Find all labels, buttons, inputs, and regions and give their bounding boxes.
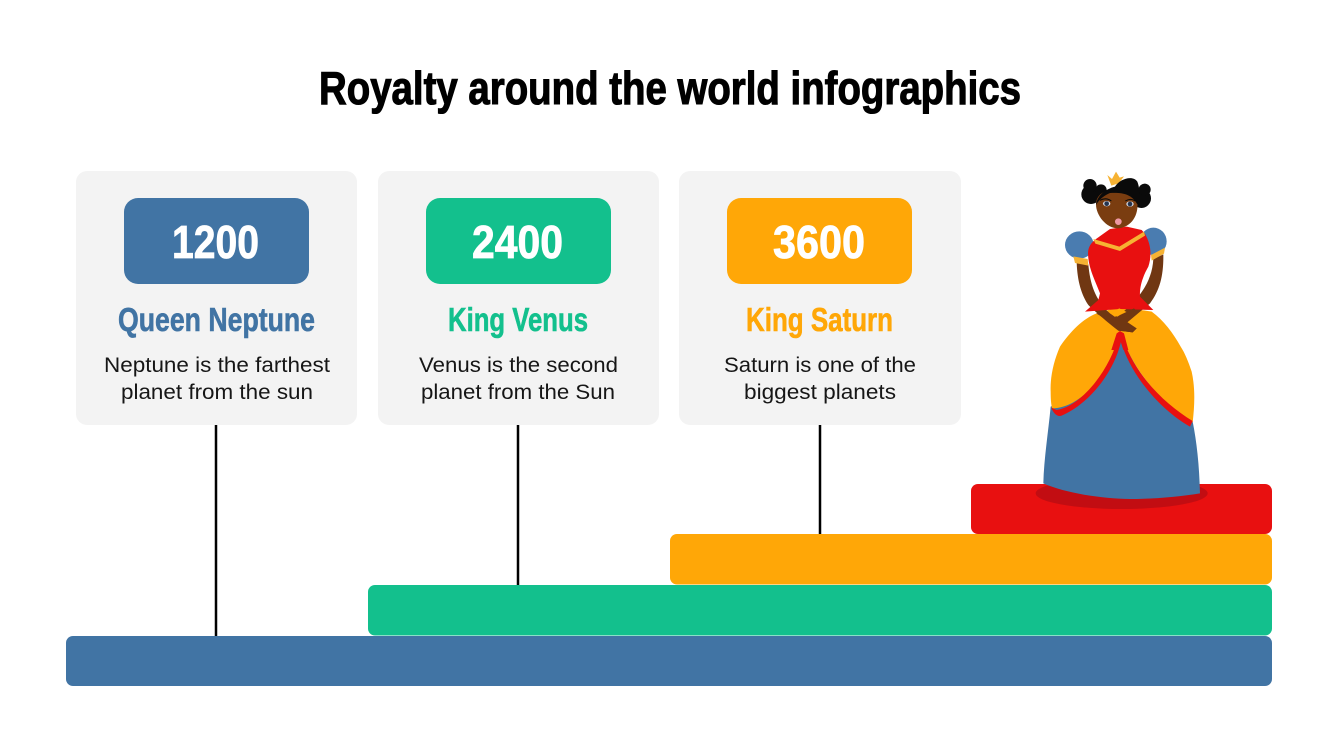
connector: King Venus xyxy=(517,424,519,585)
description xyxy=(104,353,330,404)
bar: blue step xyxy=(66,636,1272,686)
panel: King Saturn xyxy=(679,171,961,425)
panel: King Venus xyxy=(378,171,659,425)
panel: Queen Neptune xyxy=(76,171,357,425)
name: Queen Neptune: Queen Neptune xyxy=(118,301,315,338)
description: planet from the Sun xyxy=(421,380,615,404)
description: Neptune is the farthest xyxy=(104,353,330,377)
illustration: queen figure xyxy=(1036,172,1208,509)
name: King Saturn: King Saturn xyxy=(746,301,893,338)
bar: green step xyxy=(368,585,1272,636)
title: Royalty around the world infographics xyxy=(319,62,1021,114)
description: Venus is the second xyxy=(419,353,618,377)
year badge: 2400 xyxy=(426,198,611,284)
description: Saturn is one of the xyxy=(724,353,916,377)
year badge: 1200: 1200 xyxy=(172,216,259,268)
connector: Queen Neptune xyxy=(215,424,217,636)
description xyxy=(724,353,916,404)
name: King Venus: King Venus xyxy=(448,301,588,338)
staircase bars xyxy=(66,484,1272,686)
year badge: 1200 xyxy=(124,198,309,284)
connector: King Saturn xyxy=(819,424,821,534)
description: planet from the sun xyxy=(121,380,313,404)
year badge: 2400: 2400 xyxy=(472,216,563,268)
year badge: 3600: 3600 xyxy=(773,216,865,268)
year badge: 3600 xyxy=(727,198,912,284)
description xyxy=(419,353,618,404)
description: biggest planets xyxy=(744,380,896,404)
bar: orange step xyxy=(670,534,1272,584)
bar: red step xyxy=(971,484,1272,534)
